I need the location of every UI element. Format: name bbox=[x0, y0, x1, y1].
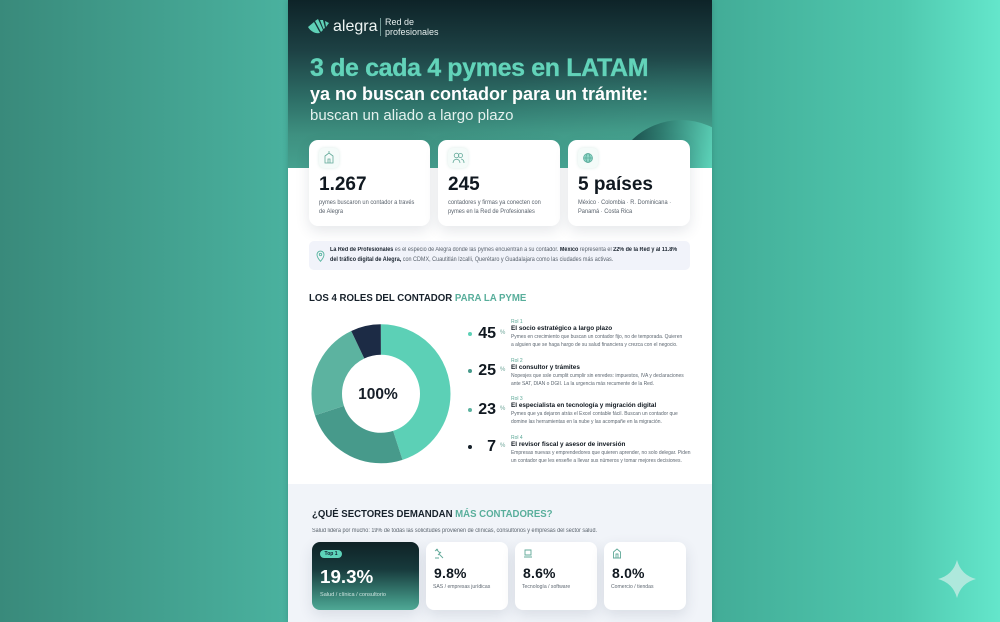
role 4: Rol 4 bbox=[511, 435, 523, 441]
percentage: 45 bbox=[478, 325, 496, 342]
divider label bbox=[380, 18, 439, 36]
caption: de Alegra bbox=[319, 208, 343, 215]
heading: sectores: ¿QUÉ SECTORES DEMANDAN MÁS CONTADORES? bbox=[312, 509, 552, 520]
value: 9.8% bbox=[434, 564, 467, 580]
header band bbox=[288, 0, 712, 168]
icon: globe bbox=[578, 148, 598, 168]
logo bbox=[308, 17, 439, 37]
divider label: profesionales bbox=[385, 26, 439, 36]
caption bbox=[578, 199, 671, 215]
role 4 bbox=[468, 435, 690, 464]
role 1 bbox=[468, 319, 682, 348]
role 1: Rol 1 bbox=[511, 319, 523, 325]
callout text bbox=[330, 247, 677, 262]
callout text: del tráfico digital de Alegra, con CDMX, Cuautitlán Izcalli, Querétaro y Guadalajara como las ciudades más activas. bbox=[330, 256, 613, 262]
label: Tecnología / software bbox=[522, 584, 570, 590]
role 2: Nopesjes que ssle cumplit cumplir sin enredes: impuestos, IVA y declaraciones bbox=[511, 373, 684, 379]
caption: contadores y firmas ya conecten con bbox=[448, 199, 541, 206]
icon: laptop bbox=[524, 550, 532, 558]
sector card: comercio bbox=[604, 542, 686, 610]
sector card: SAS bbox=[426, 542, 508, 610]
icon: gavel bbox=[434, 548, 444, 558]
caption: Panamá · Costa Rica bbox=[578, 208, 632, 215]
bullet bbox=[468, 332, 472, 336]
value: 19.3% bbox=[320, 566, 373, 587]
caption: pymes en la Red de Profesionales bbox=[448, 208, 535, 215]
role 1: El socio estratégico a largo plazo bbox=[511, 325, 612, 332]
role 1: Pymes en crecimiento que buscan un contador fijo, no de temporada. Quieren bbox=[511, 334, 682, 340]
percentage: 23 bbox=[478, 401, 496, 418]
unit: % bbox=[500, 406, 505, 412]
callout: red de profesionales bbox=[309, 241, 690, 270]
sectors subtitle: Salud lidera por mucho: 19% de todas las solicitudes provienen de clínicas, consultorios y empresas del sector salud. bbox=[312, 528, 597, 534]
role 2: El consultor y trámites bbox=[511, 364, 580, 371]
icon: alegra mark bbox=[308, 19, 329, 34]
icon: people bbox=[448, 148, 468, 168]
caption bbox=[319, 199, 414, 215]
role 2 bbox=[468, 358, 684, 387]
title line 3: buscan un aliado a largo plazo bbox=[310, 107, 513, 124]
unit: % bbox=[500, 330, 505, 336]
role 4: Empresas nuevas y emprendedores que quieren aprender, no solo delegar. Piden bbox=[511, 450, 690, 456]
icon: building bbox=[319, 148, 339, 168]
role 4: El revisor fiscal y asesor de inversión bbox=[511, 441, 625, 448]
stat card: contadores bbox=[438, 140, 560, 226]
role text bbox=[511, 358, 684, 387]
role text bbox=[511, 319, 682, 348]
icon: sparkle bbox=[938, 560, 976, 598]
caption: pymes buscaron un contador a través bbox=[319, 199, 414, 206]
caption bbox=[448, 199, 541, 215]
bullet bbox=[468, 408, 472, 412]
title line 2: ya no buscan contador para un trámite: bbox=[310, 84, 648, 104]
icon: location pin bbox=[316, 250, 324, 262]
role 4: un contador que les enseñe a llevar sus números y tomar mejores decisiones. bbox=[511, 458, 682, 464]
panel: sectores bbox=[288, 484, 712, 622]
icon: store bbox=[613, 548, 621, 558]
label: Comercio / tiendas bbox=[611, 584, 654, 590]
panel: infographic page bbox=[288, 0, 712, 622]
value: 8.0% bbox=[612, 564, 645, 580]
divider label: Red de bbox=[385, 17, 414, 27]
sector card: salud bbox=[312, 542, 419, 610]
role 3 bbox=[468, 396, 678, 425]
unit: % bbox=[500, 367, 505, 373]
role text bbox=[511, 435, 690, 464]
callout text: La Red de Profesionales es el especio de Alegra donde las pymes encuentran a su contador. México representa el 22% de la Red y al 11.8% bbox=[330, 247, 677, 253]
badge bbox=[320, 550, 342, 558]
donut center label: 100% bbox=[358, 386, 398, 403]
value: 245 bbox=[448, 174, 480, 195]
stat card: países bbox=[568, 140, 690, 226]
role 2: ante SAT, DIAN o DGII. La la urgencia más recumente de la Red. bbox=[511, 381, 654, 387]
bullet bbox=[468, 369, 472, 373]
role 3: Rol 3 bbox=[511, 396, 523, 402]
bullet bbox=[468, 445, 472, 449]
role 1: a alguien que se haga hargo de su salud financiera y crezca con el negocio. bbox=[511, 342, 678, 348]
decorative circle bbox=[611, 120, 751, 260]
title line 1: 3 de cada 4 pymes en LATAM bbox=[310, 54, 648, 82]
wordmark: alegra bbox=[333, 18, 377, 35]
heading: roles: LOS 4 ROLES DEL CONTADOR PARA LA PYME bbox=[309, 293, 526, 304]
donut chart bbox=[312, 324, 450, 464]
stat card: pymes bbox=[309, 140, 430, 226]
unit: % bbox=[500, 443, 505, 449]
percentage: 7 bbox=[487, 438, 496, 455]
role text bbox=[511, 396, 678, 425]
badge: Top 1 bbox=[325, 551, 337, 557]
role 3: Pymes que ya dejaron atrás el Excel contable fácil. Buscan un contador que bbox=[511, 411, 678, 417]
sector card: tecnología bbox=[515, 542, 597, 610]
role 2: Rol 2 bbox=[511, 358, 523, 364]
label: Salud / clínica / consultorio bbox=[320, 592, 386, 598]
role 3: domine las herramientas en la nube y las acompañe en la migración. bbox=[511, 419, 662, 425]
value: 5 países bbox=[578, 174, 653, 195]
value: 8.6% bbox=[523, 564, 556, 580]
label: SAS / empresas jurídicas bbox=[433, 584, 490, 590]
percentage: 25 bbox=[478, 362, 496, 379]
value: 1.267 bbox=[319, 174, 367, 195]
role list bbox=[468, 319, 690, 464]
caption: México · Colombia · R. Dominicana · bbox=[578, 199, 671, 206]
role 3: El especialista en tecnología y migración digital bbox=[511, 402, 656, 409]
title bbox=[310, 54, 648, 124]
